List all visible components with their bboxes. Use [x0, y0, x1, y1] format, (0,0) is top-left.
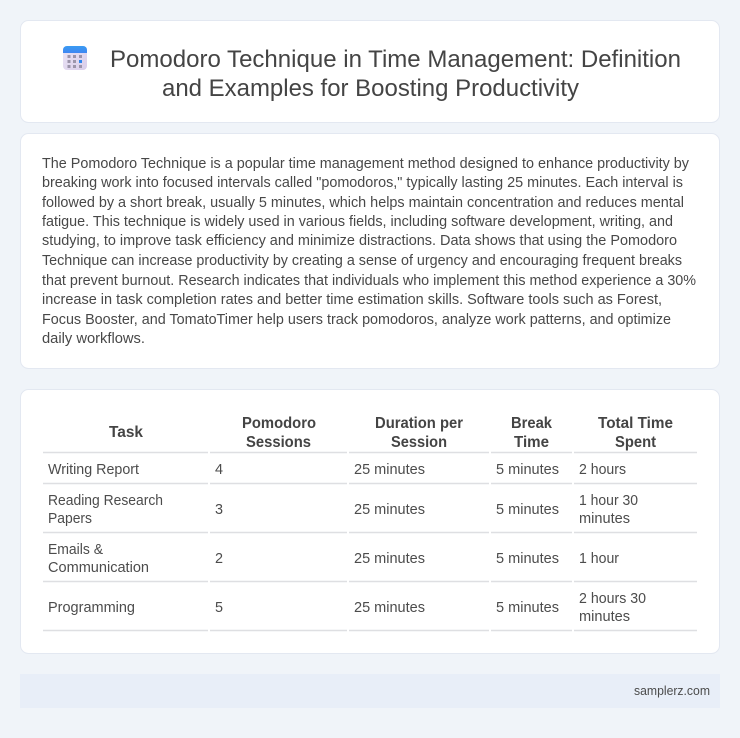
table row: writing report: 5 minutes — [496, 462, 559, 478]
text block: description paragraph: studying, to improve task efficiency and minimize distractions. Data shows that using the Pomodoro — [42, 233, 677, 249]
table header: Session — [391, 434, 447, 451]
table header: Duration per — [375, 415, 463, 432]
table header: Total Time — [598, 415, 673, 432]
table row: reading research papers: Papers — [48, 511, 92, 527]
table row: programming: Programming — [48, 600, 135, 616]
text block: description paragraph: daily workflows. — [42, 331, 145, 347]
table row: programming: 2 hours 30 — [579, 591, 646, 607]
table row: emails and communication: Emails & — [48, 542, 103, 558]
footer — [20, 674, 720, 708]
table row: writing report: Writing Report — [48, 462, 139, 478]
table row: programming: minutes — [579, 609, 630, 625]
panel: description — [20, 134, 720, 368]
table row: emails and communication: 2 — [215, 551, 223, 567]
text block: description paragraph — [42, 156, 696, 347]
icon: calendar — [63, 46, 87, 70]
table row: reading research papers: minutes — [579, 511, 630, 527]
title: Pomodoro Technique in Time Management: Definition — [110, 46, 681, 73]
table row: reading research papers: Reading Research — [48, 493, 163, 509]
table header: Sessions — [246, 434, 311, 451]
text block: description paragraph: breaking work into focused intervals called "pomodoros," typically lasting 25 minutes. Each interval is — [42, 175, 683, 191]
title: and Examples for Boosting Productivity — [162, 75, 579, 102]
table row: programming: 5 minutes — [496, 600, 559, 616]
text block: description paragraph: followed by a short break, usually 5 minutes, which helps maintain concentration and reduces mental — [42, 195, 684, 211]
table row: writing report — [48, 462, 626, 478]
text block: description paragraph: fatigue. This technique is widely used in various fields, including software development, writing, and — [42, 214, 673, 230]
text block: description paragraph: that prevent burnout. Research indicates that individuals who implement this method experience a 30% — [42, 273, 696, 289]
text block: description paragraph: Technique can increase productivity by creating a sense of urgency and encouraging frequent breaks — [42, 253, 682, 269]
footer source text: samplerz.com — [634, 684, 710, 698]
table header: Spent — [615, 434, 657, 451]
text block: description paragraph: increase in task completion rates and better time estimation skills. Software tools such as Forest, — [42, 292, 662, 308]
table row: programming — [48, 591, 646, 625]
table row: emails and communication: 25 minutes — [354, 551, 425, 567]
table row: emails and communication — [48, 542, 619, 576]
table row: reading research papers: 25 minutes — [354, 502, 425, 518]
title — [110, 46, 681, 102]
text block: description paragraph: Focus Booster, and TomatoTimer help users track pomodoros, analyze work patterns, and optimize — [42, 312, 671, 328]
table row: programming: 25 minutes — [354, 600, 425, 616]
table header: Break — [511, 415, 552, 432]
table header: Time — [514, 434, 549, 451]
panel: title header — [20, 20, 720, 122]
table row: writing report: 4 — [215, 462, 223, 478]
table row: emails and communication: 1 hour — [579, 551, 619, 567]
table rules — [43, 452, 697, 630]
table row: reading research papers — [48, 493, 638, 527]
table row: writing report: 2 hours — [579, 462, 626, 478]
table header: Pomodoro — [242, 415, 316, 432]
panel: table — [20, 390, 720, 654]
table row: programming: 5 — [215, 600, 223, 616]
table row: writing report: 25 minutes — [354, 462, 425, 478]
text block: description paragraph: The Pomodoro Technique is a popular time management method designed to enhance productivity by — [42, 156, 690, 172]
table row: emails and communication: Communication — [48, 560, 149, 576]
table row: emails and communication: 5 minutes — [496, 551, 559, 567]
table row: reading research papers: 3 — [215, 502, 223, 518]
table header — [109, 415, 673, 451]
table row: reading research papers: 1 hour 30 — [579, 493, 638, 509]
table row: reading research papers: 5 minutes — [496, 502, 559, 518]
table header: Task — [109, 424, 143, 441]
